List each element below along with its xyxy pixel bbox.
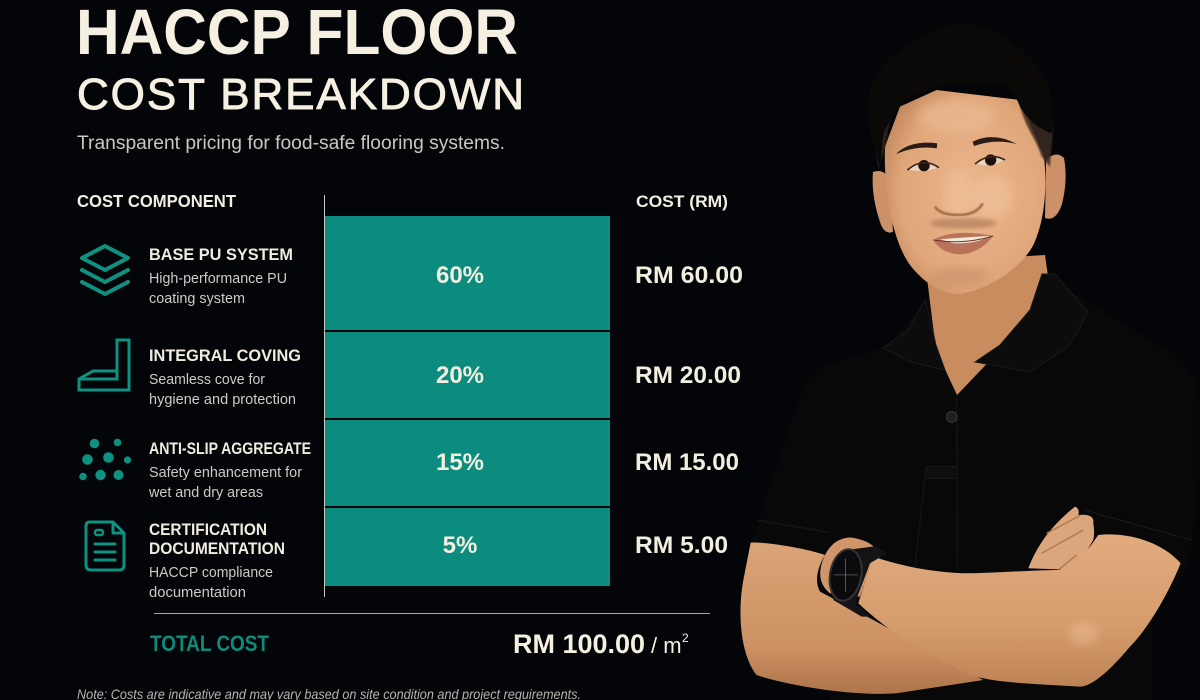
chart axis line — [324, 195, 325, 597]
bar segment: 20%: 20% — [436, 362, 484, 389]
label: certification documentation: CERTIFICATION — [149, 520, 267, 539]
label: certification documentation — [149, 520, 285, 601]
total value: 2 — [682, 631, 689, 645]
label: integral coving — [149, 346, 301, 408]
portrait: man with crossed arms — [740, 24, 1200, 700]
row: anti-slip aggregate — [79, 439, 311, 501]
cost values: RM 60.00 — [635, 262, 743, 289]
total divider — [154, 613, 710, 614]
watch — [826, 546, 887, 617]
label: anti-slip aggregate: Safety enhancement for — [149, 464, 302, 481]
front arm — [858, 534, 1181, 687]
label: base PU system: BASE PU SYSTEM — [149, 245, 293, 264]
label: integral coving: INTEGRAL COVING — [149, 346, 301, 365]
bar segment: 60% — [325, 216, 610, 330]
bar segment: 15% — [325, 420, 610, 506]
fingers — [1028, 507, 1094, 570]
label: certification documentation: documentation — [149, 584, 246, 601]
bar segment: 60%: 60% — [436, 262, 484, 289]
label: integral coving: Seamless cove for — [149, 371, 265, 388]
face — [868, 24, 1053, 294]
icon: coving profile — [79, 340, 129, 390]
icon: document — [86, 522, 124, 570]
label: integral coving: hygiene and protection — [149, 391, 296, 408]
row: certification documentation — [86, 520, 285, 601]
label: certification documentation: DOCUMENTATION — [149, 539, 285, 558]
label: base PU system — [149, 245, 293, 307]
column header: cost component: COST COMPONENT — [77, 191, 236, 211]
column header: cost: COST (RM) — [636, 193, 728, 211]
bar segment: 20% — [325, 332, 610, 418]
ears — [873, 154, 1066, 233]
cost values: RM 15.00 — [635, 449, 739, 476]
label: anti-slip aggregate — [148, 440, 311, 501]
icon: aggregate dots — [79, 439, 131, 480]
torso and shirt — [751, 275, 1200, 700]
cost values — [635, 262, 743, 559]
cost values: RM 5.00 — [635, 532, 728, 559]
bar segment: 5% — [325, 508, 610, 586]
total label: TOTAL COST — [150, 631, 269, 656]
total value: / m — [651, 633, 682, 658]
label: base PU system: High-performance PU — [149, 270, 287, 287]
label: certification documentation: HACCP compliance — [149, 564, 273, 581]
hair — [868, 24, 1053, 167]
back arm — [740, 507, 1094, 694]
nose — [935, 203, 983, 215]
eyes — [908, 163, 938, 171]
temple stubble — [1020, 97, 1053, 167]
total value: RM 100.00 — [513, 629, 645, 659]
cost values: RM 20.00 — [635, 362, 741, 389]
eyebrows — [896, 143, 937, 154]
subtitle: Transparent pricing for food-safe flooring systems. — [77, 133, 505, 154]
collar — [883, 274, 1088, 372]
bar segment: 15%: 15% — [436, 449, 484, 476]
row: base PU system — [82, 245, 293, 307]
neck — [925, 255, 1050, 395]
label: anti-slip aggregate: wet and dry areas — [148, 484, 263, 501]
mouth — [933, 233, 993, 254]
row: integral coving — [79, 340, 301, 408]
icon: layers — [82, 246, 128, 294]
stacked bar chart — [325, 216, 610, 586]
label: anti-slip aggregate: ANTI-SLIP AGGREGATE — [149, 440, 311, 458]
title: COST BREAKDOWN — [77, 70, 524, 119]
bar segment: 5%: 5% — [443, 532, 477, 559]
label: base PU system: coating system — [149, 290, 245, 307]
title — [76, 0, 524, 119]
